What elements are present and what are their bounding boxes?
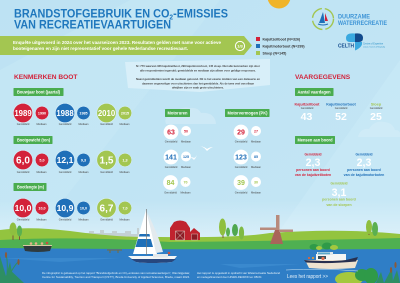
chart row: bouwjaar: 1989 [14, 109, 32, 118]
stat: mensen kajuitmotorboot: van de kajuitmotorboten [344, 173, 384, 177]
chart row: bouwjaar: Mediaan [120, 122, 130, 126]
chart row: bouwjaar: Gemiddeld [59, 122, 72, 126]
logo: CELTH: CELTH [338, 44, 354, 50]
text block: methodology [125, 59, 270, 92]
title: BRANDSTOFGEBRUIK EN CO [14, 7, 180, 20]
label: Mensen aan boord [295, 136, 335, 144]
logo: CELTH [338, 33, 385, 50]
logo: CELTH: Centre of Expertise [363, 42, 384, 46]
stat: mensen kajuitzeilboot: 2,3 [306, 157, 320, 169]
text block: methodology: alle respondenten ingevuld; gemiddelde en mediaan zijn alleen voor geldige responses. [140, 68, 256, 72]
icon: reeds left [0, 252, 24, 283]
chart: motoruren: Gemiddeld [164, 190, 177, 194]
chart: motorvermogen: Mediaan [251, 140, 262, 144]
chart: motorvermogen: Mediaan [251, 190, 262, 194]
chart: motorvermogen: Mediaan [251, 165, 262, 169]
stat: mensen kajuitzeilboot [295, 152, 331, 177]
chart: motoruren: 70 [184, 180, 188, 184]
chart row: bootgewicht: Gemiddeld [100, 170, 113, 174]
label: Bootgewicht [14, 136, 52, 144]
logo: Duurzame Waterrecreatie: DUURZAME [338, 14, 370, 20]
icon: small motor boat [23, 242, 52, 252]
logo: Duurzame Waterrecreatie: WATERRECREATIE [338, 21, 387, 27]
title: VAN RECREATIEVAARTUIGEN [14, 19, 171, 32]
icon: sun [268, 0, 290, 8]
chart: motoruren: Mediaan [181, 140, 192, 144]
label: Bootlengte chart row: Gemiddeld [17, 218, 30, 222]
chart row: bouwjaar: 1988 [56, 109, 74, 118]
label: Bootlengte chart row: 7,0 [122, 206, 128, 210]
stat: mensen kajuitzeilboot: van de kajuitzeilboten [295, 173, 331, 177]
chart: motorvermogen: 27 [254, 129, 258, 133]
chart row: bootgewicht: 5,0 [39, 158, 45, 162]
label: Bootlengte chart row: Mediaan [37, 218, 47, 222]
text block: footer source: Centre for Sustainability, Tourism and Transport (CSTT), Breda University of Applied Sciences, Breda, maart 2024. [42, 275, 190, 279]
link: Lees het rapport [286, 269, 358, 280]
banner: survey note: booteigenaren en zijn niet representatief voor gehele Nederlandse recreatievaart. [13, 46, 188, 51]
label: Bootlengte chart row: 10,0 [80, 206, 87, 210]
stat: mensen sloep: Gemiddeld [330, 182, 348, 186]
label: Motoruren: Motoruren [168, 111, 188, 116]
chart row: bouwjaar: 2015 [121, 111, 129, 115]
label: Mensen aan boord: Mensen aan boord [298, 138, 333, 143]
link: Lees het rapport: Lees het rapport >> [287, 274, 328, 280]
chart: motorvermogen: Gemiddeld [235, 190, 248, 194]
stat: mensen sloep: van de sloepen [326, 203, 352, 207]
text block: footer source [42, 271, 190, 279]
icon: bushes [310, 242, 338, 250]
chart row: bootgewicht: Gemiddeld [17, 170, 30, 174]
logo: CELTH: Leisure, Tourism & Hospitality [363, 46, 385, 48]
chart: motorvermogen: 29 [237, 130, 245, 137]
icon: seagulls [190, 146, 213, 160]
title [14, 7, 228, 32]
label: Bootlengte chart row: 10,0 [15, 203, 32, 213]
icon: sailboat [128, 209, 177, 263]
icon: check badge: 1/3 [237, 44, 244, 49]
chart row: bootgewicht: Mediaan [120, 170, 130, 174]
label: Bootgewicht: Bootgewicht (ton) [17, 138, 51, 143]
chart row: bootgewicht: 1,5 [100, 156, 114, 167]
chart: motorvermogen [234, 125, 262, 194]
stat: mensen kajuitzeilboot: Gemiddeld [304, 152, 322, 156]
text block: methodology: Naast gemiddelden wordt de mediaan getoond. Dit is het exacte midden van een dataserie en [136, 77, 260, 81]
label: Bouwjaar boot [14, 88, 64, 96]
label: Bootlengte chart row: 10,9 [57, 203, 74, 213]
chart: motoruren: Gemiddeld [165, 165, 178, 169]
legend: Kajuitmotorboot (N=299) [262, 44, 305, 48]
chart row: bouwjaar: 1985 [79, 111, 88, 115]
label: Bootlengte chart row: 6,7 [100, 204, 114, 215]
label: Motorvermogen: Motorvermogen (PK) [228, 111, 268, 116]
chart row: bouwjaar [13, 103, 132, 126]
stat: mensen kajuitmotorboot: Gemiddeld [355, 152, 373, 156]
trees: left [10, 222, 22, 240]
label: Bootlengte: Bootlengte (m) [17, 185, 44, 190]
chart: motorvermogen: 30 [254, 180, 258, 184]
chart row: bouwjaar: Mediaan [37, 122, 47, 126]
chart: motoruren: 84 [167, 180, 174, 187]
landscape: hills [0, 228, 400, 252]
stat: mensen sloep [322, 182, 356, 207]
label: Bouwjaar boot: Bouwjaar boot (jaartal) [17, 90, 61, 95]
icon: check badge [235, 41, 245, 51]
cloud: centre [165, 108, 216, 124]
stats: vaardagen: Gemiddeld [301, 106, 314, 110]
label: Bootlengte [14, 183, 46, 191]
cloud: top right [358, 122, 400, 137]
chart: motoruren: 50 [184, 129, 188, 133]
chart row: bootgewicht: 6,0 [16, 156, 30, 167]
chart: motorvermogen: 123 [235, 155, 247, 162]
heading: Vaargegevens: VAARGEGEVENS [295, 74, 351, 81]
chart: motorvermogen: Gemiddeld [235, 165, 248, 169]
chart row: bootgewicht: 9,3 [81, 158, 86, 162]
chart: motoruren: 141 [165, 155, 177, 162]
chart row: bouwjaar: Gemiddeld [100, 122, 113, 126]
chart row: bouwjaar: 2010 [98, 109, 116, 118]
text block: footer source: De infographic is gebaseerd op het rapport "Brandstofgebruik en CO₂-emissies van recreatievaartuigen", Olav Eijgelaar, [42, 271, 190, 275]
icon: large motor boat [304, 252, 358, 269]
label: Bootlengte chart row: Gemiddeld [59, 218, 72, 222]
chart row: bootgewicht: 12,1 [57, 155, 74, 165]
chart row: bootgewicht: 1,3 [122, 158, 128, 162]
label: Aantal vaardagen [295, 88, 334, 96]
chart: motoruren: 125 [183, 155, 189, 159]
label: Bootlengte chart row: 10,0 [38, 206, 46, 210]
heading: Kenmerken boot: KENMERKEN BOOT [14, 74, 77, 81]
banner: survey note: Enquête uitgevoerd in 2024 over het vaarseizoen 2023. Resultaten gelden met name voor actieve [13, 40, 222, 45]
chart row: bootgewicht: Mediaan [37, 170, 47, 174]
label: Motoruren [165, 109, 190, 117]
chart row: bootgewicht: Gemiddeld [59, 170, 72, 174]
icon: windmill [260, 215, 293, 244]
legend: Kajuitzeilboot (N=326) [262, 37, 301, 41]
text block: methodology: daarmee ongevoeliger voor uitschieters dan het gemiddelde. Als de twee veel van elkaar [142, 81, 255, 85]
stats: vaardagen: Sloep [371, 102, 382, 106]
chart row: bouwjaar: Gemiddeld [17, 122, 30, 126]
text block: methodology: N= 770 waarvan 326 kajuitzeilboot, 299 kajuitmotorboot, 145 sloep. Niet alle kenmerken zijn door [136, 64, 261, 68]
stats: vaardagen: Gemiddeld [335, 106, 348, 110]
label: Bootlengte chart row: Mediaan [79, 218, 89, 222]
stat: mensen kajuitmotorboot: 2,3 [357, 157, 371, 169]
label: Bootlengte chart row: Mediaan [120, 218, 130, 222]
trees: right [366, 220, 378, 236]
text block: footer commission [197, 271, 280, 279]
icon: dock [107, 250, 122, 253]
banner: survey note [0, 36, 252, 55]
chart: motoruren: Gemiddeld [165, 140, 178, 144]
stats: vaardagen: Kajuitmotorboot [326, 102, 356, 106]
chart row: bootgewicht [13, 150, 132, 174]
text block: footer commission: en medegefinancierd door HISWA-RECRON en CBCN. [197, 275, 262, 279]
stat: mensen kajuitmotorboot: personen aan boord [347, 168, 381, 172]
chart row: bouwjaar: Mediaan [79, 122, 89, 126]
title: -EMISSIES [173, 7, 228, 20]
title: 2 [169, 14, 173, 21]
label: Bootlengte chart row [13, 198, 132, 222]
chart: motoruren: Mediaan [181, 190, 191, 194]
stats: vaardagen [295, 102, 383, 123]
chart: motorvermogen: 39 [237, 180, 245, 187]
text block: methodology: afwijken zijn er vaak grote uitschieters. [172, 86, 224, 90]
skyline [85, 228, 147, 237]
logo: Duurzame Waterrecreatie [312, 8, 387, 30]
stats: vaardagen: Kajuitzeilboot [295, 102, 320, 106]
stat: mensen kajuitzeilboot: personen aan boord [296, 168, 330, 172]
chart: motorvermogen: Gemiddeld [235, 140, 248, 144]
chart row: bouwjaar: 1990 [38, 111, 46, 115]
icon: barns [170, 220, 200, 240]
trees: centre right [219, 218, 244, 240]
stat: mensen kajuitmotorboot [344, 152, 384, 177]
chart: motoruren: Mediaan [181, 165, 192, 169]
legend [256, 37, 305, 55]
legend: Sloep (N=145) [262, 51, 287, 55]
text block: footer commission: Het rapport is opgesteld in opdracht van Waterrecreatie Nederland [197, 271, 280, 275]
landscape: water [0, 248, 400, 283]
label: Motorvermogen [225, 109, 270, 117]
stats: vaardagen: 43 [301, 111, 312, 123]
chart: motoruren [163, 125, 192, 194]
label: Bootlengte chart row: Gemiddeld [100, 218, 113, 222]
label: Aantal vaardagen: Aantal vaardagen [298, 90, 331, 95]
chart: motorvermogen: 85 [254, 155, 258, 159]
chart: motoruren: 63 [167, 130, 175, 137]
stats: vaardagen: Gemiddeld [370, 106, 383, 110]
stats: vaardagen: 52 [335, 111, 347, 123]
chart row: bootgewicht: Mediaan [79, 170, 89, 174]
stat: mensen sloep: personen aan boord [322, 198, 356, 202]
stats: vaardagen: 25 [370, 111, 382, 123]
icon: bushes and reeds bottom right [335, 262, 400, 283]
stat: mensen sloep: 3,1 [332, 187, 346, 199]
